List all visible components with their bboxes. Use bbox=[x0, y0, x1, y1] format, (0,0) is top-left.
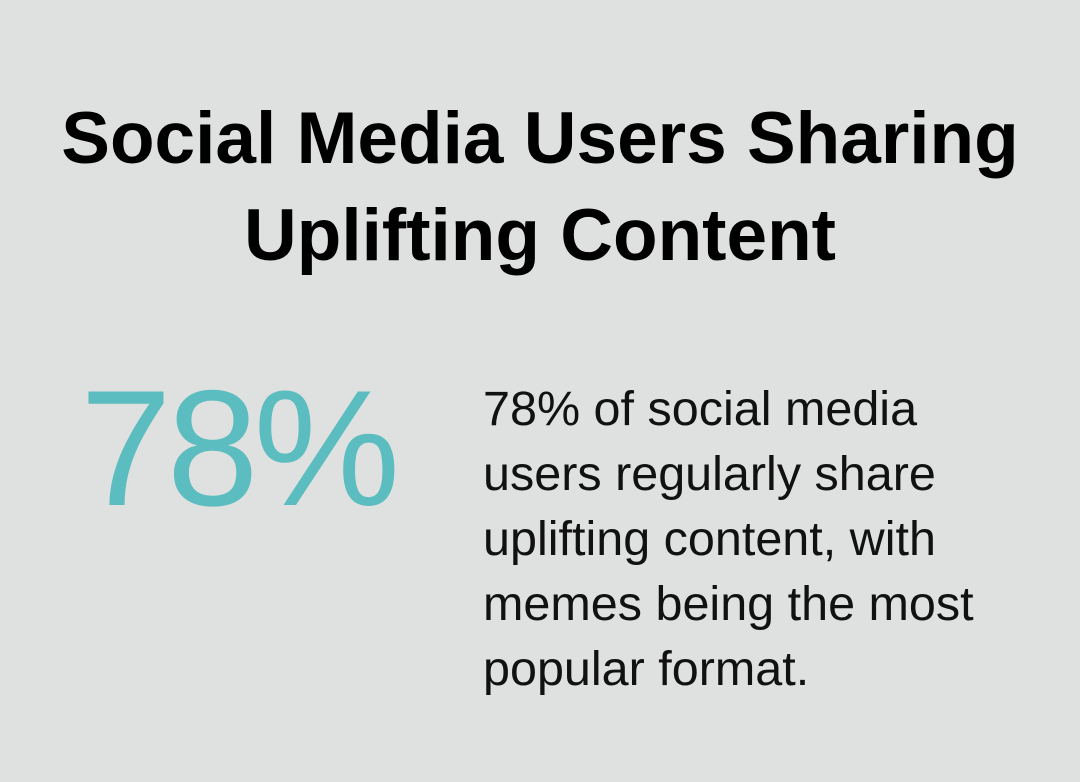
description text bbox=[483, 382, 974, 696]
description text: 78% of social media bbox=[483, 382, 917, 436]
title bbox=[61, 98, 1019, 276]
title: Social Media Users Sharing bbox=[61, 98, 1019, 179]
description text: popular format. bbox=[483, 642, 809, 696]
description text: uplifting content, with bbox=[483, 512, 936, 566]
big statistic: 78% bbox=[80, 356, 395, 540]
title: Uplifting Content bbox=[244, 195, 836, 276]
description text: memes being the most bbox=[483, 577, 974, 631]
description text: users regularly share bbox=[483, 447, 936, 501]
